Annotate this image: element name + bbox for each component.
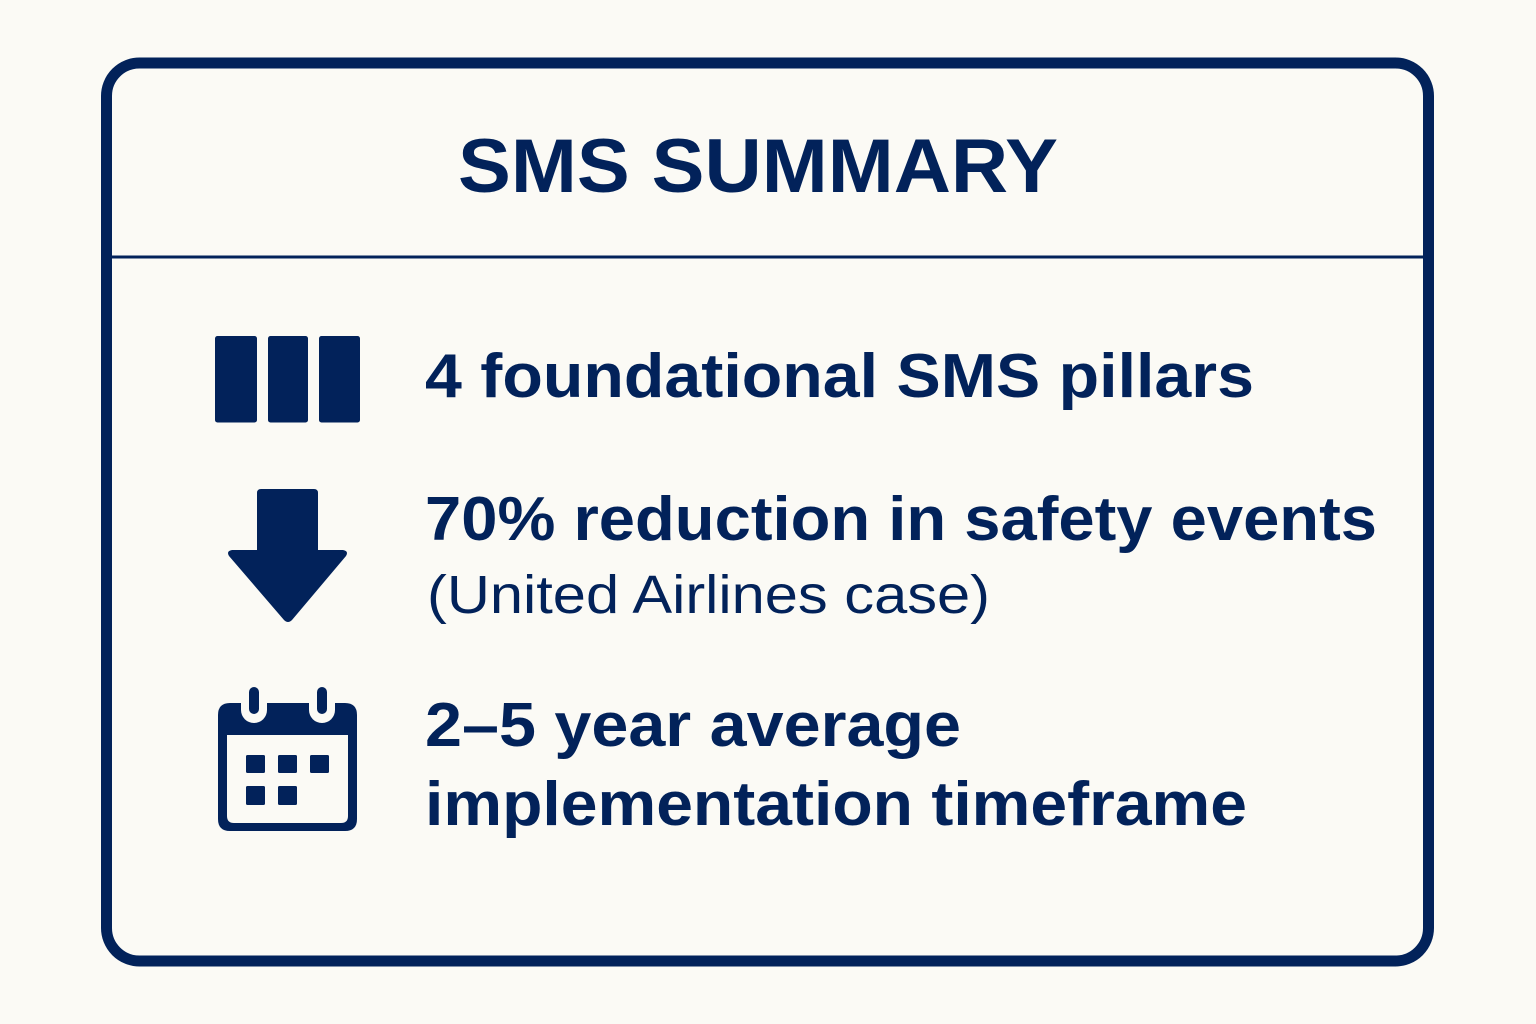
icon: calendar (218, 680, 357, 831)
text: pillars: 4 foundational SMS pillars (425, 342, 1254, 411)
icon: down arrow (228, 489, 347, 622)
icon: three pillars (215, 336, 360, 422)
card frame (106, 63, 1428, 961)
timeframe line one: 2–5 year average (425, 691, 961, 760)
text: timeframe (425, 691, 1247, 839)
case note: (United Airlines case) (427, 565, 990, 625)
timeframe line two: implementation timeframe (425, 770, 1247, 839)
title: SMS SUMMARY (458, 124, 1058, 209)
text: reduction (425, 485, 1377, 625)
reduction headline: 70% reduction in safety events (425, 485, 1377, 554)
panel: summary card (106, 63, 1428, 961)
